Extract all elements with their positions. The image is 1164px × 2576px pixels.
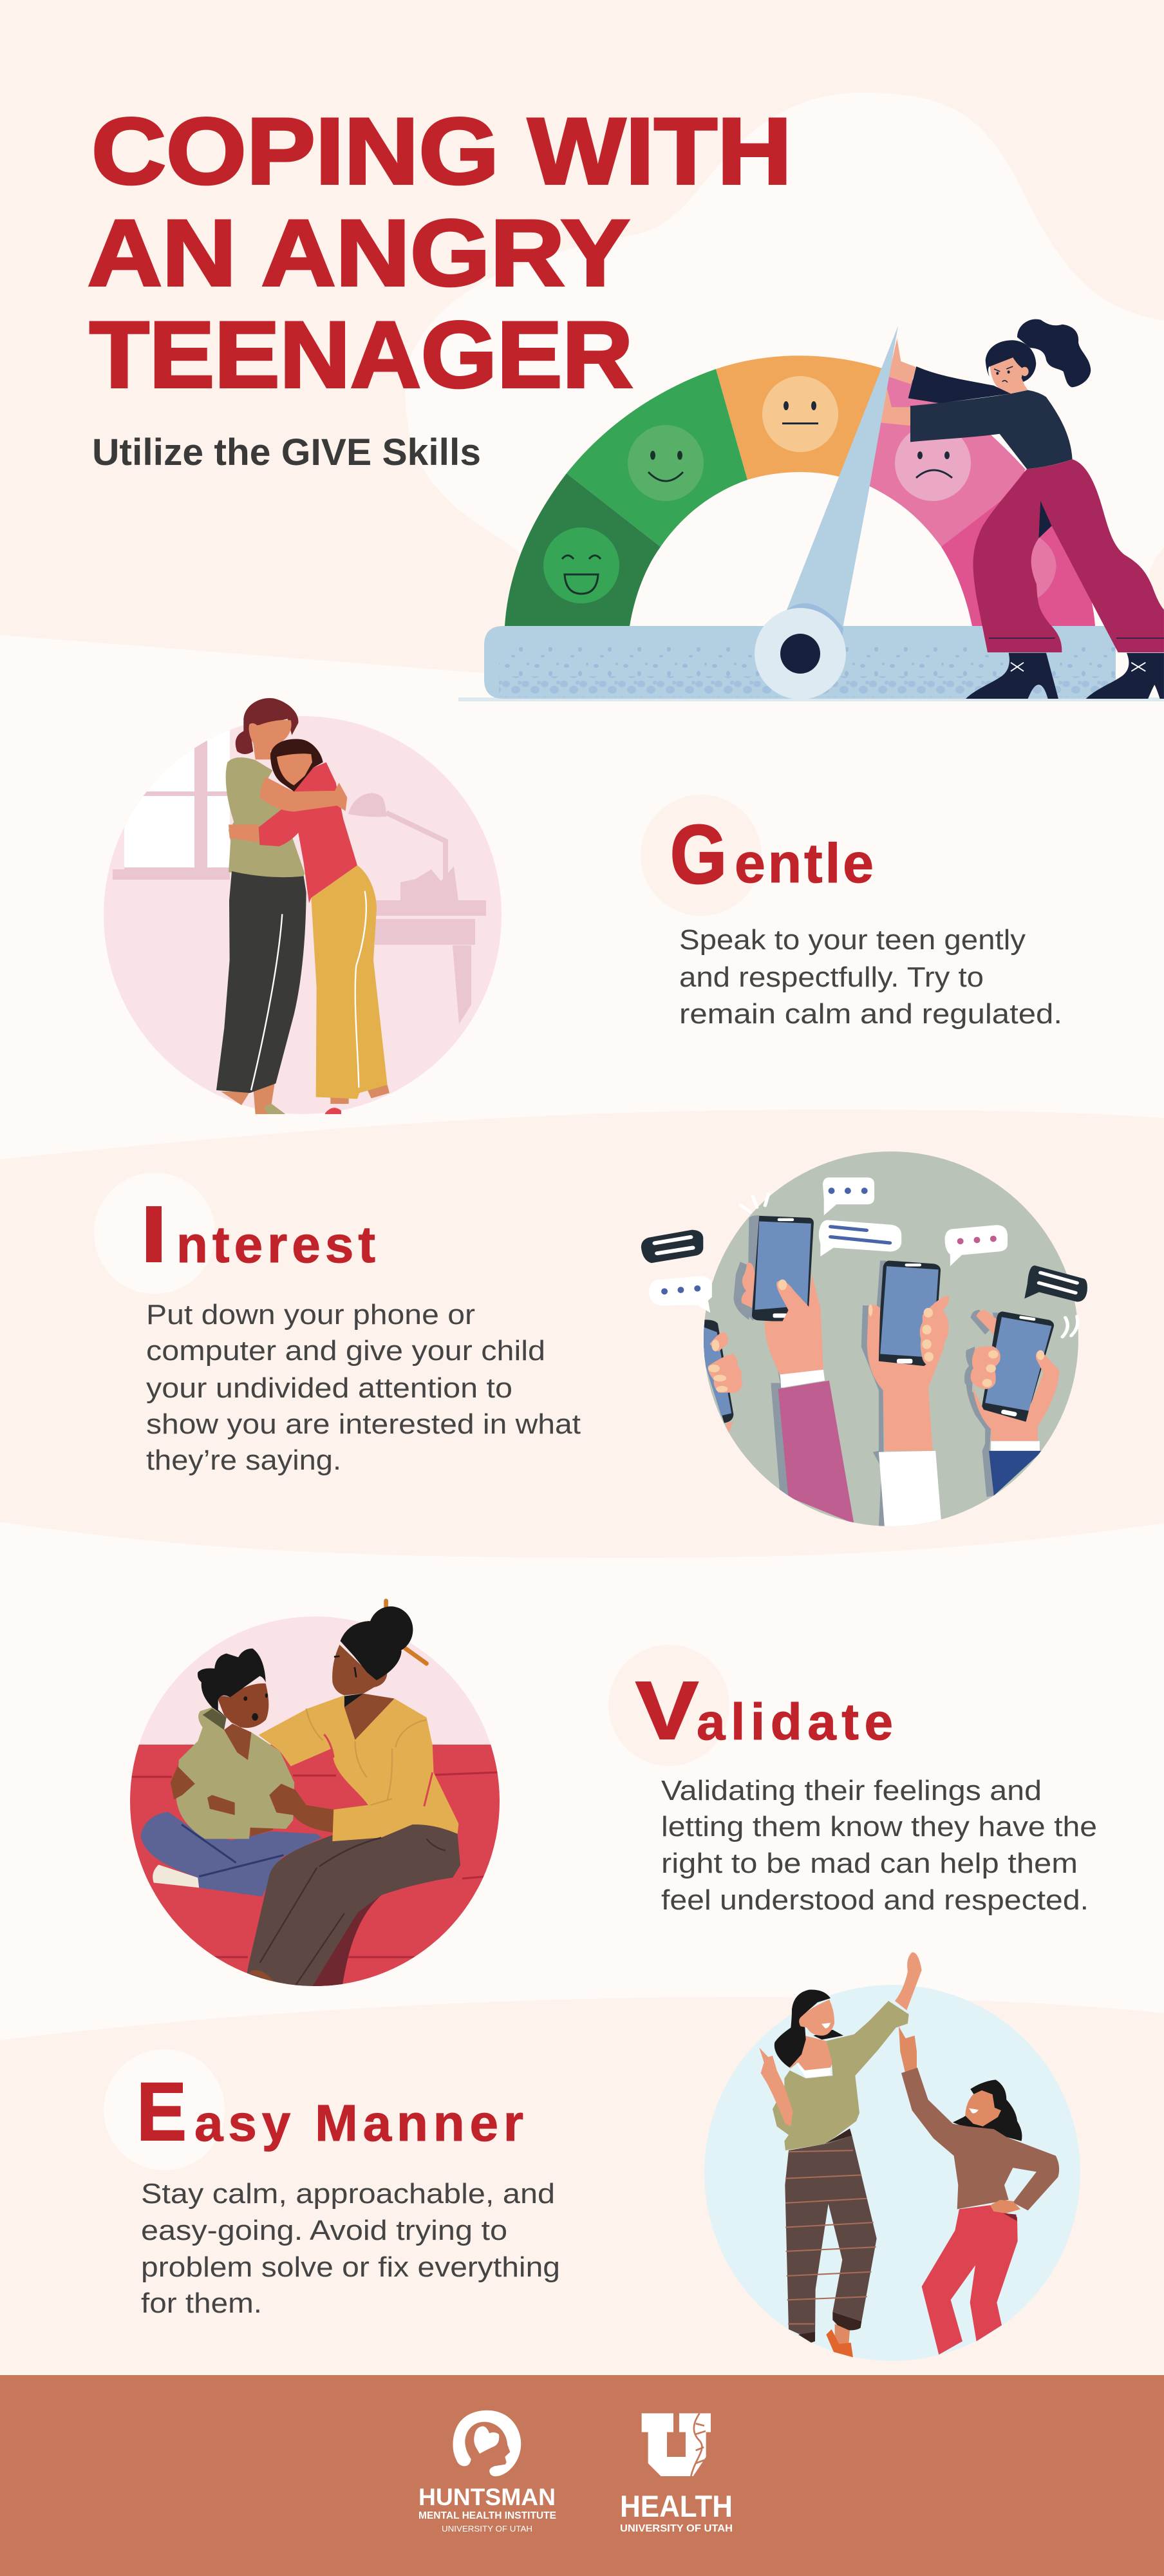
body: Easy Manner: problem solve or fix everything — [141, 2251, 560, 2283]
header background — [0, 0, 1164, 683]
illustration: sofa talk — [129, 1601, 502, 1993]
boy's trousers — [140, 1812, 322, 1897]
body: Validate — [661, 1775, 1097, 1916]
body: Easy Manner: easy-going. Avoid trying to — [141, 2215, 507, 2246]
face: happy — [628, 425, 704, 501]
boy's belly — [250, 1826, 273, 1836]
gauge: needle collar — [784, 603, 843, 647]
body: Interest: computer and give your child — [146, 1335, 545, 1367]
teen trouser highlight — [355, 891, 366, 1088]
mother's trousers — [245, 1824, 460, 1987]
boot laces — [1011, 663, 1145, 671]
heading: Validate — [635, 1665, 893, 1757]
circle background — [104, 716, 502, 1114]
boy's neck — [224, 1723, 252, 1760]
mother's feet — [221, 1083, 285, 1114]
trousers — [973, 459, 1164, 652]
mother's left hand — [171, 1766, 195, 1799]
pink sleeve arm — [733, 1215, 854, 1524]
foot — [248, 1970, 274, 1982]
title: TEENAGER — [89, 302, 633, 407]
mother's features — [334, 1656, 356, 1677]
body: Interest: your undivided attention to — [146, 1372, 512, 1404]
heading: Easy Manner — [136, 2066, 523, 2158]
trouser highlight — [251, 914, 282, 1090]
heading: Easy Manner: E — [136, 2066, 187, 2158]
gauge: pink segment — [863, 367, 1026, 547]
pant stripes — [785, 2150, 876, 2324]
torso and lower sleeve — [910, 390, 1073, 469]
logo: University of Utah Health — [620, 2413, 733, 2534]
gauge: hub — [755, 608, 846, 699]
gauge: base — [484, 626, 1116, 699]
teen's face — [277, 753, 312, 785]
body: Gentle: remain calm and regulated. — [679, 998, 1062, 1030]
sweater, woman two — [901, 2068, 1059, 2210]
illustration: hug — [97, 698, 502, 1114]
hair — [341, 1621, 402, 1680]
body: Interest — [146, 1299, 581, 1476]
cuff lines — [989, 637, 1164, 639]
trouser creases — [182, 1824, 283, 1877]
logo icon: head ring with heart — [453, 2410, 521, 2476]
face, woman two — [965, 2090, 1001, 2126]
figures — [759, 1953, 1059, 2357]
hair, woman two — [953, 2079, 1022, 2141]
boy's hoodie — [176, 1707, 294, 1839]
woman pushing needle — [879, 319, 1164, 699]
mother's shirt — [226, 757, 305, 877]
heading: Validate: alidate — [697, 1693, 893, 1750]
body: Validate: letting them know they have the — [661, 1811, 1097, 1842]
bubble: left dots — [649, 1276, 712, 1312]
face — [990, 357, 1029, 393]
band: easy manner background — [0, 1997, 1164, 2375]
neck hair — [813, 2030, 843, 2040]
face, woman one — [799, 2000, 834, 2036]
face: neutral — [762, 376, 838, 452]
top strap — [796, 2062, 831, 2078]
gauge: dark pink segment — [941, 470, 1095, 626]
upper hand — [888, 338, 916, 384]
boot: left — [966, 653, 1058, 699]
title: AN ANGRY — [88, 200, 630, 305]
gauge illustration — [458, 319, 1164, 701]
hair, woman one — [774, 1990, 831, 2068]
circle background — [704, 1151, 1078, 1526]
white sleeve arm — [861, 1260, 949, 1527]
crotch shadow — [1038, 500, 1053, 538]
raised arm, woman one — [895, 1953, 922, 2011]
neckline shadow — [344, 1694, 363, 1707]
mother's shirt — [259, 1695, 458, 1841]
subtitle: Utilize the GIVE Skills — [92, 431, 481, 473]
hood lining — [203, 1709, 227, 1730]
mother's right arm — [269, 1784, 333, 1833]
gauge: green segment — [567, 369, 747, 547]
shoe — [826, 2329, 853, 2357]
mother's lower hand — [229, 824, 259, 842]
sofa — [129, 1745, 502, 1993]
hand on hip — [990, 2200, 1020, 2213]
teen's shirt — [259, 762, 357, 904]
title — [88, 99, 792, 407]
boy's arm — [207, 1795, 235, 1815]
boot: right — [1086, 653, 1164, 699]
logo: Huntsman: UNIVERSITY OF UTAH — [442, 2524, 532, 2533]
body: Gentle: Speak to your teen gently — [679, 924, 1026, 956]
body: Easy Manner: Stay calm, approachable, and — [141, 2178, 555, 2210]
logo: University of Utah Health: UNIVERSITY OF UTAH — [620, 2523, 733, 2534]
mother's arm — [259, 777, 347, 811]
heading: Validate: V — [635, 1665, 699, 1757]
gauge: floor line — [458, 697, 1164, 701]
boy's face — [218, 1683, 268, 1728]
navy sleeve arm — [964, 1310, 1060, 1497]
letter circle: V — [608, 1645, 729, 1766]
hair — [986, 340, 1036, 382]
smile — [821, 2023, 831, 2028]
circle background — [130, 1616, 500, 1986]
smile, woman two — [969, 2108, 979, 2114]
body: Easy Manner: for them. — [141, 2287, 262, 2319]
body: Validate: feel understood and respected. — [661, 1884, 1089, 1916]
ponytail — [1017, 319, 1091, 387]
teen's shoe — [325, 1108, 341, 1114]
letter circle: I — [94, 1173, 215, 1294]
teen's trousers — [311, 866, 388, 1099]
body: Interest: Put down your phone or — [146, 1299, 475, 1331]
bubble: pink dots — [945, 1225, 1008, 1266]
mother's chest — [344, 1694, 395, 1740]
body: Gentle — [679, 924, 1062, 1030]
red pants — [922, 2205, 1018, 2354]
bubble: dark left — [641, 1230, 703, 1263]
gauge: orange segment — [716, 355, 888, 480]
heading: Easy Manner: asy Manner — [194, 2094, 523, 2152]
heading: Gentle: G — [670, 809, 727, 901]
ankle — [835, 2324, 850, 2345]
mother's trousers — [216, 871, 306, 1093]
teen's hair — [270, 739, 323, 791]
footer — [0, 2375, 1164, 2576]
mother's face — [249, 720, 292, 759]
heading: Gentle — [670, 809, 874, 901]
logo: Huntsman: MENTAL HEALTH INSTITUTE — [418, 2510, 556, 2521]
arms and phones — [701, 1215, 1060, 1527]
belt — [825, 2128, 852, 2144]
heading: Interest: nterest — [176, 1216, 375, 1273]
illustration: high five — [704, 1953, 1080, 2361]
trouser shadow — [312, 1895, 381, 1987]
pant waistband shadow — [1003, 2213, 1017, 2221]
illustration: phones — [641, 1151, 1087, 1527]
pants, woman one — [785, 2136, 877, 2342]
left arm and hand — [759, 2048, 793, 2126]
hair stick — [386, 1601, 426, 1663]
mother's head, hair bun and stick — [332, 1601, 426, 1695]
body: Gentle: and respectfully. Try to — [679, 961, 984, 993]
gauge lobe behind legs — [1026, 537, 1056, 598]
body: Interest: they’re saying. — [146, 1444, 341, 1476]
face: sad — [895, 425, 971, 501]
logo: Huntsman — [418, 2410, 556, 2533]
letter circle: G — [641, 795, 762, 916]
boy's sock — [153, 1864, 199, 1888]
shirt seam — [324, 1734, 433, 1806]
shirt details — [306, 1709, 426, 1805]
hugging figures — [216, 698, 390, 1114]
lower hand — [879, 386, 911, 426]
gauge: needle — [787, 326, 898, 628]
header background: right edge blob — [1149, 547, 1164, 618]
upper sleeve — [908, 366, 1011, 403]
face: very happy — [543, 527, 619, 603]
body: Validate: Validating their feelings and — [661, 1775, 1042, 1806]
sweater, woman one — [773, 2001, 909, 2150]
logo: Huntsman: HUNTSMAN — [418, 2484, 556, 2510]
notification ticks — [740, 1194, 1078, 1337]
mother's shoe — [264, 1104, 285, 1114]
neck and chest, woman one — [790, 2036, 832, 2070]
body: Interest: show you are interested in what — [146, 1408, 581, 1440]
hair bun — [369, 1606, 413, 1653]
boy's features — [243, 1693, 268, 1721]
bubble: dark right — [1024, 1265, 1087, 1302]
title: COPING WITH — [91, 99, 792, 204]
trouser creases — [260, 1837, 446, 1985]
speech bubbles — [641, 1177, 1087, 1337]
circle background — [704, 1985, 1080, 2361]
body: Validate: right to be mad can help them — [661, 1848, 1078, 1879]
boy's hair — [198, 1649, 266, 1718]
heading: Gentle: entle — [735, 833, 874, 895]
body: Easy Manner — [141, 2178, 560, 2319]
bubble: lines — [819, 1220, 901, 1256]
letter circle: E — [104, 2049, 225, 2170]
mother's hair — [236, 698, 298, 754]
teen's feet — [330, 1085, 390, 1104]
room: window, table, lamp — [97, 721, 486, 1024]
gauge: dark green segment — [505, 473, 661, 626]
mother's face — [332, 1645, 387, 1695]
bubble: top dots — [823, 1177, 874, 1215]
logo: University of Utah Health: HEALTH — [620, 2489, 733, 2523]
figures — [140, 1649, 460, 1987]
cuffs — [798, 2312, 861, 2343]
raised hand, woman two — [899, 2026, 917, 2074]
left phone and hand — [701, 1320, 742, 1434]
logo icon: block U with DNA — [642, 2413, 711, 2476]
band: interest background — [0, 1110, 1164, 1558]
